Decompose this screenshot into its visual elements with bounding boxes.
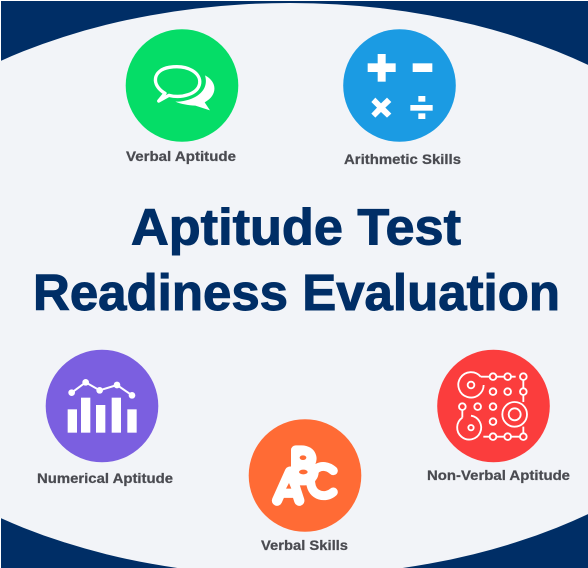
title: Aptitude Test — [131, 198, 461, 256]
label: Numerical Aptitude — [37, 470, 173, 486]
icon: ABC letters on orange circle — [249, 419, 361, 532]
item: numerical aptitude — [37, 350, 173, 486]
label: Arithmetic Skills — [344, 151, 461, 167]
item: verbal skills — [249, 419, 361, 553]
label: Verbal Aptitude — [126, 148, 236, 164]
icon: bar and line chart on purple circle — [46, 350, 158, 462]
icon: circuit of circles on red circle — [437, 350, 550, 462]
icon: speech bubbles on green circle — [126, 29, 238, 142]
title: Readiness Evaluation — [33, 264, 560, 321]
icon: math operators on blue circle — [343, 29, 456, 142]
item: arithmetic skills — [343, 29, 461, 167]
item: non-verbal aptitude — [427, 350, 570, 483]
label: Non-Verbal Aptitude — [427, 467, 570, 483]
title — [33, 198, 560, 321]
label: Verbal Skills — [261, 537, 348, 553]
item: verbal aptitude — [126, 29, 238, 164]
